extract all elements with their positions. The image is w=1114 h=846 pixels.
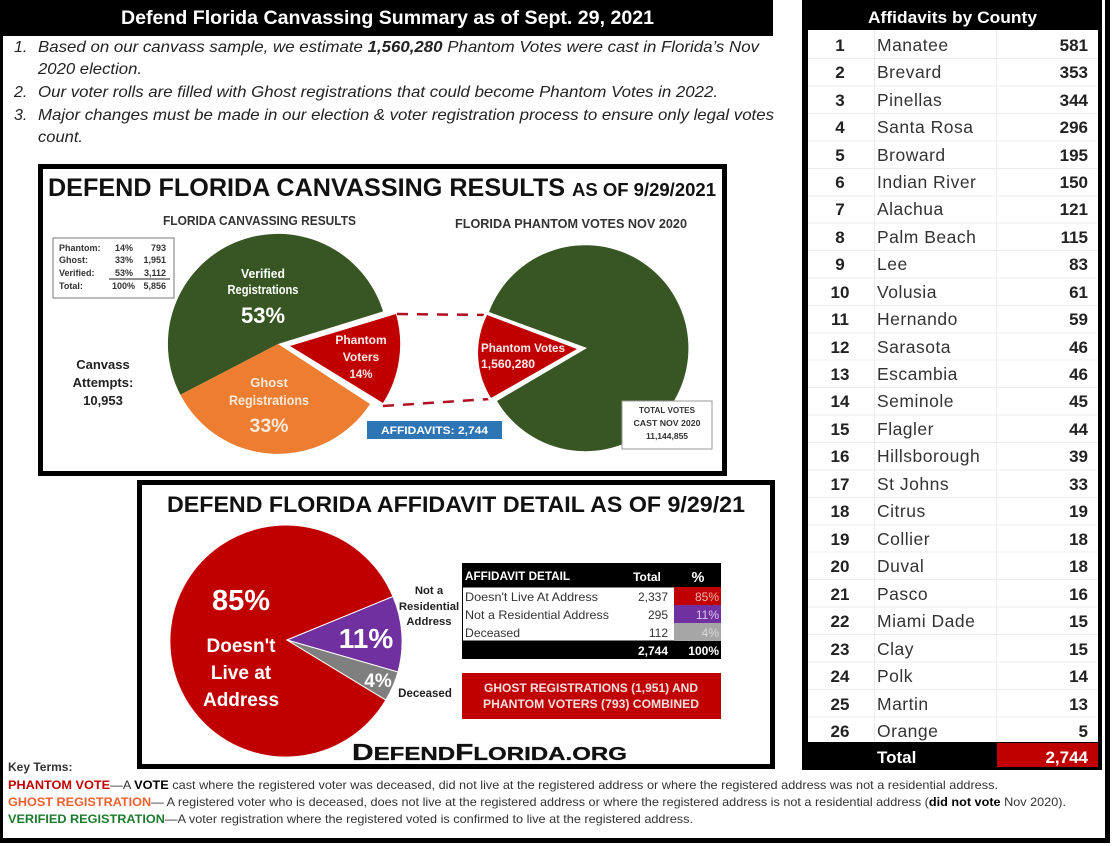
county rows: 15 — [1069, 612, 1088, 631]
county rows: 33 — [1069, 475, 1088, 494]
total votes box: CAST NOV 2020 — [634, 418, 701, 428]
total votes box: TOTAL VOTES — [639, 405, 695, 415]
dashed connector lines — [383, 314, 490, 406]
county rows: 46 — [1069, 338, 1088, 357]
panel: affidavit detail — [140, 482, 772, 766]
phantom label: 14% — [349, 369, 373, 381]
affidavits badge — [367, 421, 502, 439]
phantom votes label: Phantom Votes — [481, 341, 565, 355]
county rows: Citrus — [877, 501, 926, 521]
county rows: Pasco — [877, 584, 928, 604]
key terms: Key Terms: — [8, 760, 72, 774]
county rows: 3 — [835, 91, 845, 110]
county rows: 23 — [831, 640, 849, 659]
phantom label — [335, 333, 387, 381]
county total: Total — [877, 748, 916, 767]
affidavits badge: AFFIDAVITS: 2,744 — [381, 425, 489, 437]
phantom slice — [290, 314, 400, 403]
combined note — [462, 673, 721, 719]
summary list — [13, 39, 774, 146]
county rows: 581 — [1060, 36, 1088, 55]
county rows: Brevard — [877, 62, 942, 82]
county rows: 46 — [1069, 365, 1088, 384]
summary list: 1. — [14, 39, 27, 56]
verified label: 53% — [241, 303, 285, 328]
affidavit detail table: Doesn't Live At Address — [465, 590, 598, 604]
affidavit detail table: 11% — [696, 608, 719, 622]
county rows: 344 — [1060, 91, 1089, 110]
county rows: 19 — [831, 530, 849, 549]
county table heading: Affidavits by County — [868, 8, 1038, 27]
canvassing pie chart — [168, 234, 400, 454]
canvassing heading: DEFEND FLORIDA CANVASSING RESULTS — [48, 174, 565, 202]
county rows: 2 — [835, 63, 845, 82]
county rows: 22 — [831, 612, 849, 631]
county rows: Collier — [877, 529, 930, 549]
county rows: 10 — [831, 283, 849, 302]
county rows: 5 — [835, 146, 845, 165]
county rows: Polk — [877, 666, 913, 686]
summary list: Major changes must be made in our election & voter registration process to ensure only legal votes — [38, 107, 774, 124]
county rows: Hillsborough — [877, 446, 980, 466]
verified label: Registrations — [228, 283, 299, 297]
county rows: 18 — [1069, 557, 1088, 576]
ghost label: 33% — [249, 415, 289, 437]
canvass attempts: 10,953 — [83, 393, 123, 408]
county rows: 18 — [831, 502, 849, 521]
small results table: Phantom: — [59, 243, 101, 253]
pie labels: 11% — [339, 623, 393, 654]
label: deceased: Deceased — [398, 688, 452, 700]
county rows: 16 — [831, 447, 849, 466]
summary list: 3. — [14, 107, 27, 124]
county rows — [831, 35, 1089, 741]
small results table: Ghost: — [59, 255, 88, 265]
key terms — [8, 760, 1066, 826]
ghost label: Registrations — [229, 393, 309, 408]
phantom votes label: 1,560,280 — [481, 357, 535, 371]
county rows: 26 — [831, 722, 849, 741]
county rows: 9 — [835, 255, 845, 274]
title banner — [0, 0, 773, 36]
county rows: 4 — [835, 118, 845, 137]
county rows: Sarasota — [877, 337, 951, 357]
county rows: 150 — [1060, 173, 1088, 192]
county rows: 13 — [1069, 695, 1088, 714]
county rows: 1 — [835, 36, 845, 55]
affidavit detail table: AFFIDAVIT DETAIL — [465, 571, 570, 583]
phantom votes slice — [478, 315, 577, 398]
county rows: 13 — [831, 365, 849, 384]
county rows: 11 — [831, 310, 849, 329]
canvassing heading: AS OF 9/29/2021 — [572, 180, 716, 200]
small results table: 53% — [115, 268, 133, 278]
ghost label: Ghost — [250, 375, 288, 390]
small results table: 100% — [112, 281, 135, 291]
total votes box — [622, 401, 712, 449]
county rows: 21 — [831, 585, 849, 604]
county rows: Duval — [877, 556, 924, 576]
website name: D EFEND FLORIDA.ORG — [352, 739, 627, 765]
panel: canvassing results — [40, 166, 724, 474]
affidavit detail table: 85% — [695, 590, 719, 604]
county total: 2,744 — [1045, 748, 1089, 767]
county rows: 24 — [831, 667, 850, 686]
affidavit detail table: Not a Residential Address — [465, 608, 609, 622]
county rows: 5 — [1079, 722, 1088, 741]
affidavit detail table: % — [692, 570, 705, 586]
affidavit detail table: 2,337 — [638, 590, 668, 604]
subheading: canvassing results: FLORIDA CANVASSING RESULTS — [163, 214, 356, 228]
small results table: 33% — [115, 255, 133, 265]
county rows: 195 — [1060, 146, 1088, 165]
county rows: Orange — [877, 721, 938, 741]
county rows: 14 — [1069, 667, 1089, 686]
county rows: Miami Dade — [877, 611, 975, 631]
county rows: 20 — [831, 557, 849, 576]
county rows: 83 — [1069, 255, 1088, 274]
county rows: 16 — [1069, 585, 1088, 604]
verified label — [228, 267, 299, 328]
county rows: Lee — [877, 254, 908, 274]
county rows: 6 — [835, 173, 845, 192]
small results table — [53, 238, 174, 298]
county rows: 39 — [1069, 447, 1088, 466]
county rows: Broward — [877, 145, 946, 165]
county rows: 12 — [831, 338, 849, 357]
county rows: 353 — [1060, 63, 1088, 82]
label: not a residential address: Not a — [415, 585, 444, 597]
county rows: 15 — [1069, 640, 1088, 659]
summary list: 2020 election. — [37, 61, 142, 78]
county rows: Manatee — [877, 35, 949, 55]
summary list: Our voter rolls are filled with Ghost registrations that could become Phantom Votes in 2022. — [38, 84, 718, 101]
phantom votes label — [481, 341, 565, 371]
county rows: 44 — [1069, 420, 1089, 439]
summary list: Based on our canvass sample, we estimate 1,560,280 Phantom Votes were cast in Florida’s Nov — [38, 39, 760, 56]
county rows: 61 — [1069, 283, 1088, 302]
affidavit pie chart — [170, 525, 402, 757]
county total — [877, 743, 1098, 767]
label: not a residential address: Address — [406, 616, 452, 628]
phantom label: Phantom — [335, 333, 387, 347]
small results table: 3,112 — [144, 268, 166, 278]
pie labels: Live at — [211, 663, 272, 684]
county rows: Escambia — [877, 364, 958, 384]
small results table: 5,856 — [143, 281, 166, 291]
pie labels — [203, 585, 393, 711]
canvass attempts: Attempts: — [73, 375, 133, 390]
canvass attempts — [73, 357, 133, 408]
county rows: Volusia — [877, 282, 937, 302]
phantom label: Voters — [343, 350, 380, 364]
county rows: Flagler — [877, 419, 934, 439]
county rows: Seminole — [877, 391, 954, 411]
verified registration definition: VERIFIED REGISTRATION —A voter registration where the registered voted is confirmed to live at the registered address. — [8, 812, 693, 826]
county rows: Clay — [877, 639, 914, 659]
county rows: 7 — [835, 200, 845, 219]
summary list: count. — [38, 129, 83, 146]
ghost label — [229, 375, 309, 437]
phantom votes pie chart — [478, 245, 688, 451]
county rows: 25 — [831, 695, 849, 714]
county rows: St Johns — [877, 474, 949, 494]
pie labels: 85% — [212, 585, 270, 617]
pie labels: 4% — [364, 671, 392, 692]
affidavit detail table: 295 — [648, 608, 668, 622]
combined note: PHANTOM VOTERS (793) COMBINED — [483, 699, 699, 711]
county rows: 115 — [1061, 228, 1088, 247]
combined note: GHOST REGISTRATIONS (1,951) AND — [484, 683, 698, 695]
verified label: Verified — [241, 267, 285, 281]
county rows: Indian River — [877, 172, 976, 192]
county rows: Santa Rosa — [877, 117, 973, 137]
affidavit detail table: 112 — [649, 626, 668, 640]
small results table: 1,951 — [143, 255, 166, 265]
county rows: 14 — [831, 392, 850, 411]
county rows: 17 — [831, 475, 849, 494]
county rows: 15 — [831, 420, 849, 439]
small results table: 793 — [151, 243, 166, 253]
county rows: Hernando — [877, 309, 958, 329]
small results table: Total: — [59, 281, 83, 291]
label: not a residential address: Residential — [399, 601, 459, 613]
county rows: Alachua — [877, 199, 944, 219]
canvass attempts: Canvass — [76, 357, 130, 372]
affidavit heading: DEFEND FLORIDA AFFIDAVIT DETAIL AS OF 9/29/21 — [167, 492, 745, 517]
county rows: 18 — [1069, 530, 1088, 549]
panel: affidavits by county — [802, 0, 1102, 770]
affidavit detail table: 2,744 — [638, 644, 668, 658]
county rows: Palm Beach — [877, 227, 976, 247]
county rows: 59 — [1069, 310, 1088, 329]
county rows: Pinellas — [877, 90, 942, 110]
county rows: 296 — [1060, 118, 1088, 137]
subheading: phantom votes: FLORIDA PHANTOM VOTES NOV 2020 — [455, 217, 687, 231]
pie labels: Doesn't — [207, 636, 276, 657]
county rows: 8 — [835, 228, 845, 247]
affidavit detail table: Total — [633, 570, 661, 584]
title banner: Defend Florida Canvassing Summary as of Sept. 29, 2021 — [121, 8, 654, 29]
affidavit detail table: Deceased — [465, 626, 520, 640]
county rows: 45 — [1069, 392, 1088, 411]
label: not a residential address — [399, 585, 459, 628]
summary list: 2. — [13, 84, 27, 101]
affidavit detail table — [462, 563, 721, 659]
small results table: Verified: — [59, 268, 95, 278]
phantom vote definition: PHANTOM VOTE —A VOTE cast where the registered voter was deceased, did not live at the registered address or where the registered address was not a residential address. — [8, 778, 998, 792]
county rows: Martin — [877, 694, 929, 714]
affidavit detail table: 4% — [702, 626, 719, 640]
total votes box: 11,144,855 — [646, 431, 688, 441]
county rows: 121 — [1060, 200, 1088, 219]
affidavit detail table: 100% — [688, 644, 719, 658]
county rows: 19 — [1069, 502, 1088, 521]
small results table: 14% — [115, 243, 133, 253]
pie labels: Address — [203, 690, 279, 711]
ghost registration definition: GHOST REGISTRATION — A registered voter who is deceased, does not live at the registered address or where the registered address is not a residential address ( did not vote Nov 2020). — [8, 795, 1066, 809]
